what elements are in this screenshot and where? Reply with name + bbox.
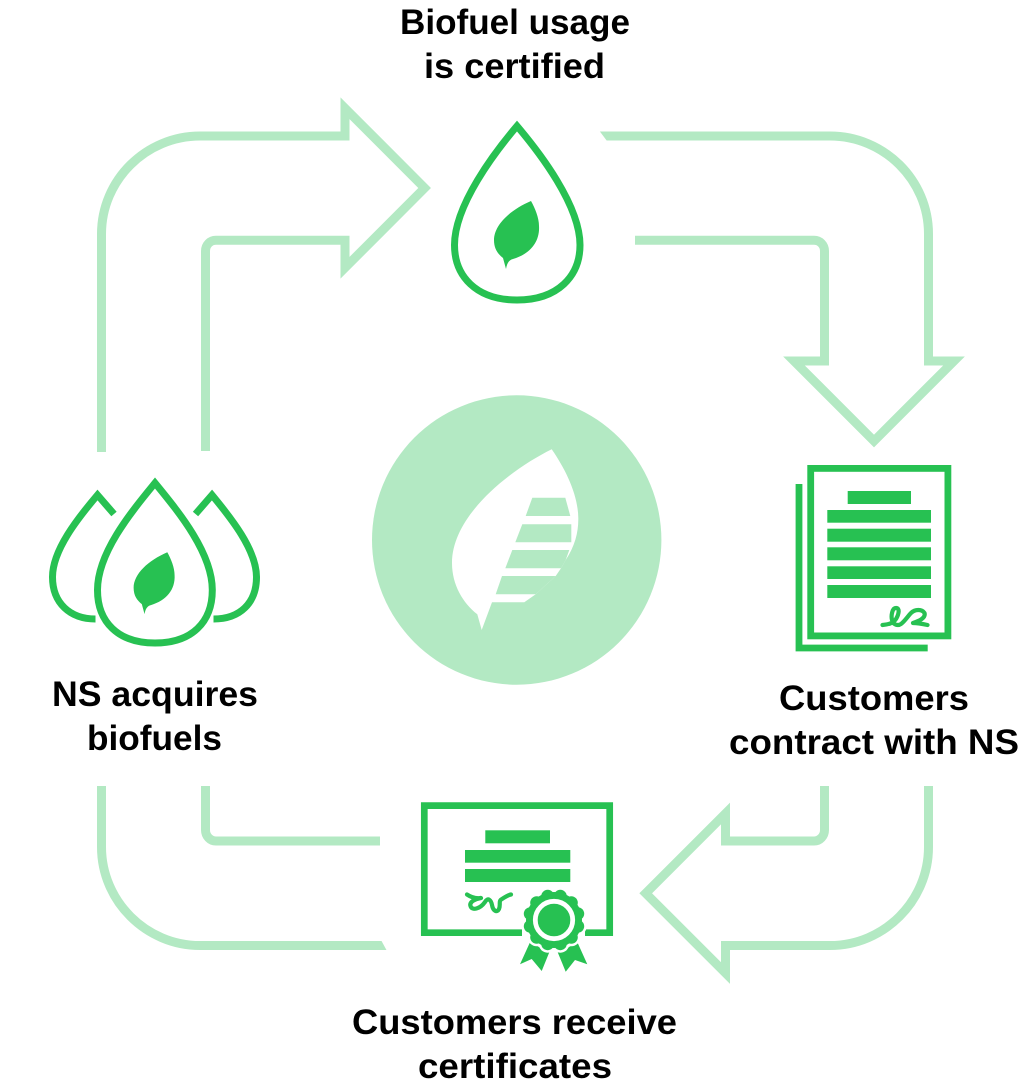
arrow: certificates to NS acquires	[102, 786, 389, 951]
label: customers contract with NS: Customers	[779, 679, 969, 718]
arrow: certified to customers contract	[596, 129, 954, 441]
label: biofuel usage is certified: Biofuel usage	[400, 3, 630, 42]
label: customers contract with NS	[729, 679, 1019, 762]
label: NS acquires biofuels: NS acquires	[52, 675, 258, 714]
label: biofuel usage is certified: is certified	[424, 47, 605, 86]
arrow: NS acquires to certified	[102, 108, 425, 452]
arrow: customers contract to certificates	[646, 786, 928, 973]
label: biofuel usage is certified	[400, 3, 630, 86]
icon: certificate with seal	[424, 806, 610, 972]
icon: three biofuel drops	[52, 483, 256, 643]
icon: single biofuel drop	[454, 126, 580, 300]
icon: signed contract	[799, 468, 948, 648]
label: customers contract with NS: contract with NS	[729, 723, 1019, 762]
centre badge: leaf in circle	[372, 395, 661, 685]
label: customers receive certificates: Customers receive	[352, 1003, 677, 1042]
label: customers receive certificates	[352, 1003, 677, 1086]
label: customers receive certificates: certificates	[418, 1047, 612, 1086]
label: NS acquires biofuels: biofuels	[87, 719, 222, 758]
label: NS acquires biofuels	[52, 675, 258, 758]
